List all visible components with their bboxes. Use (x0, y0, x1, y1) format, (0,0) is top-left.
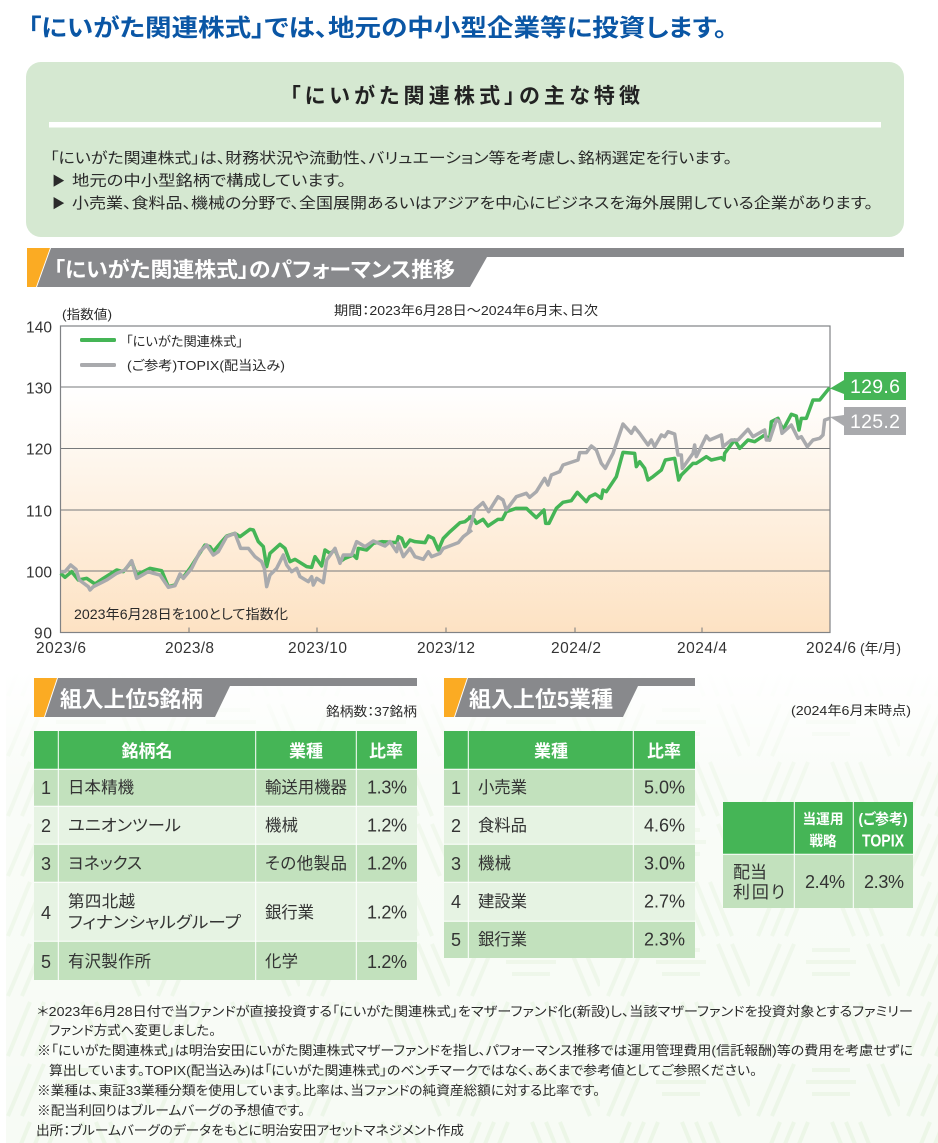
table: top 5 sectors: 4 (451, 892, 461, 912)
table: top 5 holdings (34, 731, 417, 980)
x axis labels (36, 640, 901, 657)
table: top 5 holdings: 1.2% (367, 854, 407, 874)
y axis labels: 110 (26, 504, 52, 520)
panel heading: 「にいがた関連株式」の主な特徴 (290, 84, 640, 108)
x axis labels: 2024/6 (806, 640, 856, 657)
table: top 5 holdings: 日本精機 (68, 779, 134, 797)
table: top 5 holdings: 銘柄名 (122, 741, 172, 761)
y axis labels: 90 (34, 626, 52, 642)
footnotes: ※「にいがた関連株式」は明治安田にいがた関連株式マザーファンドを指し、パフォーマンス推移では運用管理費用(信託報酬)等の費用を考慮せずに (37, 1043, 913, 1058)
feature text block: 小売業、食料品、機械の分野で、全国展開あるいはアジアを中心にビジネスを海外展開している企業があります。 (72, 195, 873, 212)
table: dividend yield: 利回り (733, 883, 785, 902)
table: dividend yield (723, 802, 913, 908)
footnotes: ファンド方式へ変更しました。 (49, 1023, 216, 1038)
table: top 5 holdings: 業種 (289, 742, 323, 761)
feature text block: 「にいがた関連株式」は、財務状況や流動性、バリュエーション等を考慮し、銘柄選定を行います。 (50, 149, 732, 167)
x axis labels: 2023/8 (165, 640, 214, 657)
table: dividend yield: 当運用 (802, 811, 844, 827)
footnotes (36, 1004, 913, 1138)
callout: 129.6 (830, 372, 906, 400)
callout: 125.2 (830, 407, 906, 435)
table: top 5 sectors: 2 (451, 816, 461, 836)
section heading: top 5 sectors (444, 678, 695, 717)
table: top 5 holdings: 機械 (265, 817, 298, 835)
table: top 5 holdings: 3 (41, 854, 51, 874)
table: dividend yield: 戦略 (810, 833, 836, 849)
gray series: TOPIX (61, 418, 830, 590)
section heading: top 5 holdings: 組入上位5銘柄 (60, 687, 203, 712)
table: top 5 holdings: 有沢製作所 (68, 953, 151, 971)
table: dividend yield: TOPIX (862, 830, 904, 850)
patterned background (6, 672, 938, 1143)
callout: 125.2: 125.2 (850, 411, 900, 433)
y axis labels: 100 (26, 564, 52, 582)
table: top 5 holdings: 1.3% (367, 778, 407, 798)
table: top 5 sectors: 5.0% (644, 778, 685, 798)
table: top 5 sectors: 比率 (647, 742, 681, 761)
y axis labels: 140 (26, 320, 52, 336)
panel: main features (26, 62, 904, 237)
table: dividend yield: 2.3% (864, 872, 904, 892)
legend (80, 334, 285, 373)
table: top 5 holdings: 比率 (369, 742, 403, 761)
section heading: performance (27, 248, 904, 287)
table: top 5 sectors: 建設業 (478, 893, 527, 911)
table: top 5 holdings: 第四北越 (68, 893, 135, 911)
line chart: performance: (指数値) (62, 307, 112, 322)
footnotes: 算出しています。TOPIX(配当込み)は「にいがた関連株式」のベンチマークではなく、あくまで参考値としてご参照ください。 (49, 1063, 757, 1078)
table: top 5 sectors: 4.6% (644, 816, 685, 836)
table: top 5 holdings: ユニオンツール (68, 817, 181, 835)
table: top 5 holdings: その他製品 (265, 855, 347, 873)
x axis labels: (年/月) (860, 641, 901, 656)
callout: 129.6: 129.6 (850, 376, 900, 398)
table: top 5 holdings: 1 (41, 778, 51, 798)
table: top 5 sectors: 銀行業 (478, 931, 527, 949)
footnotes: ※業種は、東証33業種分類を使用しています。比率は、当ファンドの純資産総額に対する比率です。 (37, 1083, 600, 1098)
footnotes: 出所：ブルームバーグのデータをもとに明治安田アセットマネジメント作成 (36, 1123, 464, 1138)
legend: (ご参考)TOPIX(配当込み) (127, 358, 285, 373)
table: top 5 holdings: 1.2% (367, 816, 407, 836)
table: top 5 holdings: 輸送用機器 (265, 779, 348, 797)
y axis labels: 120 (26, 442, 52, 458)
holdings count: 銘柄数：37銘柄 (326, 704, 417, 719)
title: 「にいがた関連株式」では、地元の中小型企業等に投資します。 (28, 14, 727, 42)
line chart: performance: 期間：2023年6月28日～2024年6月末、日次 (334, 303, 598, 318)
legend: 「にいがた関連株式」 (126, 334, 243, 349)
x axis labels: 2023/12 (417, 640, 475, 657)
table: top 5 holdings: 4 (41, 903, 51, 923)
table: top 5 sectors: 小売業 (478, 779, 527, 797)
table: top 5 sectors: 2.3% (644, 930, 685, 950)
x axis labels: 2024/2 (551, 640, 601, 657)
table: top 5 holdings: 2 (41, 816, 51, 836)
table: top 5 sectors: 3.0% (644, 854, 685, 874)
table: top 5 sectors: 機械 (478, 855, 511, 873)
section heading: top 5 sectors: 組入上位5業種 (469, 687, 613, 712)
feature text block: ▶ (52, 174, 65, 188)
table: top 5 holdings: ヨネックス (68, 855, 142, 873)
x axis labels: 2023/6 (36, 640, 86, 657)
table: top 5 sectors: 業種 (534, 742, 568, 761)
table: dividend yield: 2.4% (805, 872, 845, 892)
footnotes: ※配当利回りはブルームバーグの予想値です。 (37, 1103, 305, 1118)
section heading: top 5 holdings (34, 678, 417, 717)
table: top 5 sectors: 1 (451, 778, 461, 798)
feature text block (50, 149, 873, 212)
feature text block: ▶ (52, 196, 65, 211)
section heading: performance: 「にいがた関連株式」のパフォーマンス推移 (54, 258, 455, 282)
green series: 「にいがた関連株式」 (61, 388, 830, 587)
table: top 5 holdings: 1.2% (367, 952, 407, 972)
table: top 5 sectors (444, 731, 695, 958)
table: top 5 sectors: 2.7% (644, 892, 685, 912)
table: top 5 holdings: 銀行業 (265, 904, 314, 922)
table: dividend yield: (ご参考) (858, 810, 908, 828)
footnotes: ＊2023年6月28日付で当ファンドが直接投資する「にいがた関連株式」をマザーファンド化(新設)し、当該マザーファンドを投資対象とするファミリー (37, 1004, 913, 1019)
y axis labels: 130 (26, 380, 52, 398)
table: top 5 sectors: 食料品 (478, 817, 527, 835)
y axis labels (26, 320, 52, 642)
table: top 5 holdings: 1.2% (367, 902, 407, 922)
line chart: performance (26, 303, 906, 657)
table: top 5 holdings: 5 (41, 952, 51, 972)
x axis labels: 2023/10 (288, 640, 347, 657)
table: top 5 sectors: 5 (451, 930, 461, 950)
table: dividend yield: 配当 (733, 863, 767, 882)
table: top 5 holdings: 化学 (265, 953, 298, 971)
chart note: 2023年6月28日を100として指数化 (74, 607, 289, 622)
table: top 5 sectors: 3 (451, 854, 461, 874)
feature text block: 地元の中小型銘柄で構成しています。 (72, 172, 346, 190)
table: top 5 holdings: フィナンシャルグループ (68, 914, 242, 932)
as-of date: (2024年6月末時点) (791, 703, 911, 718)
x axis labels: 2024/4 (677, 640, 727, 657)
